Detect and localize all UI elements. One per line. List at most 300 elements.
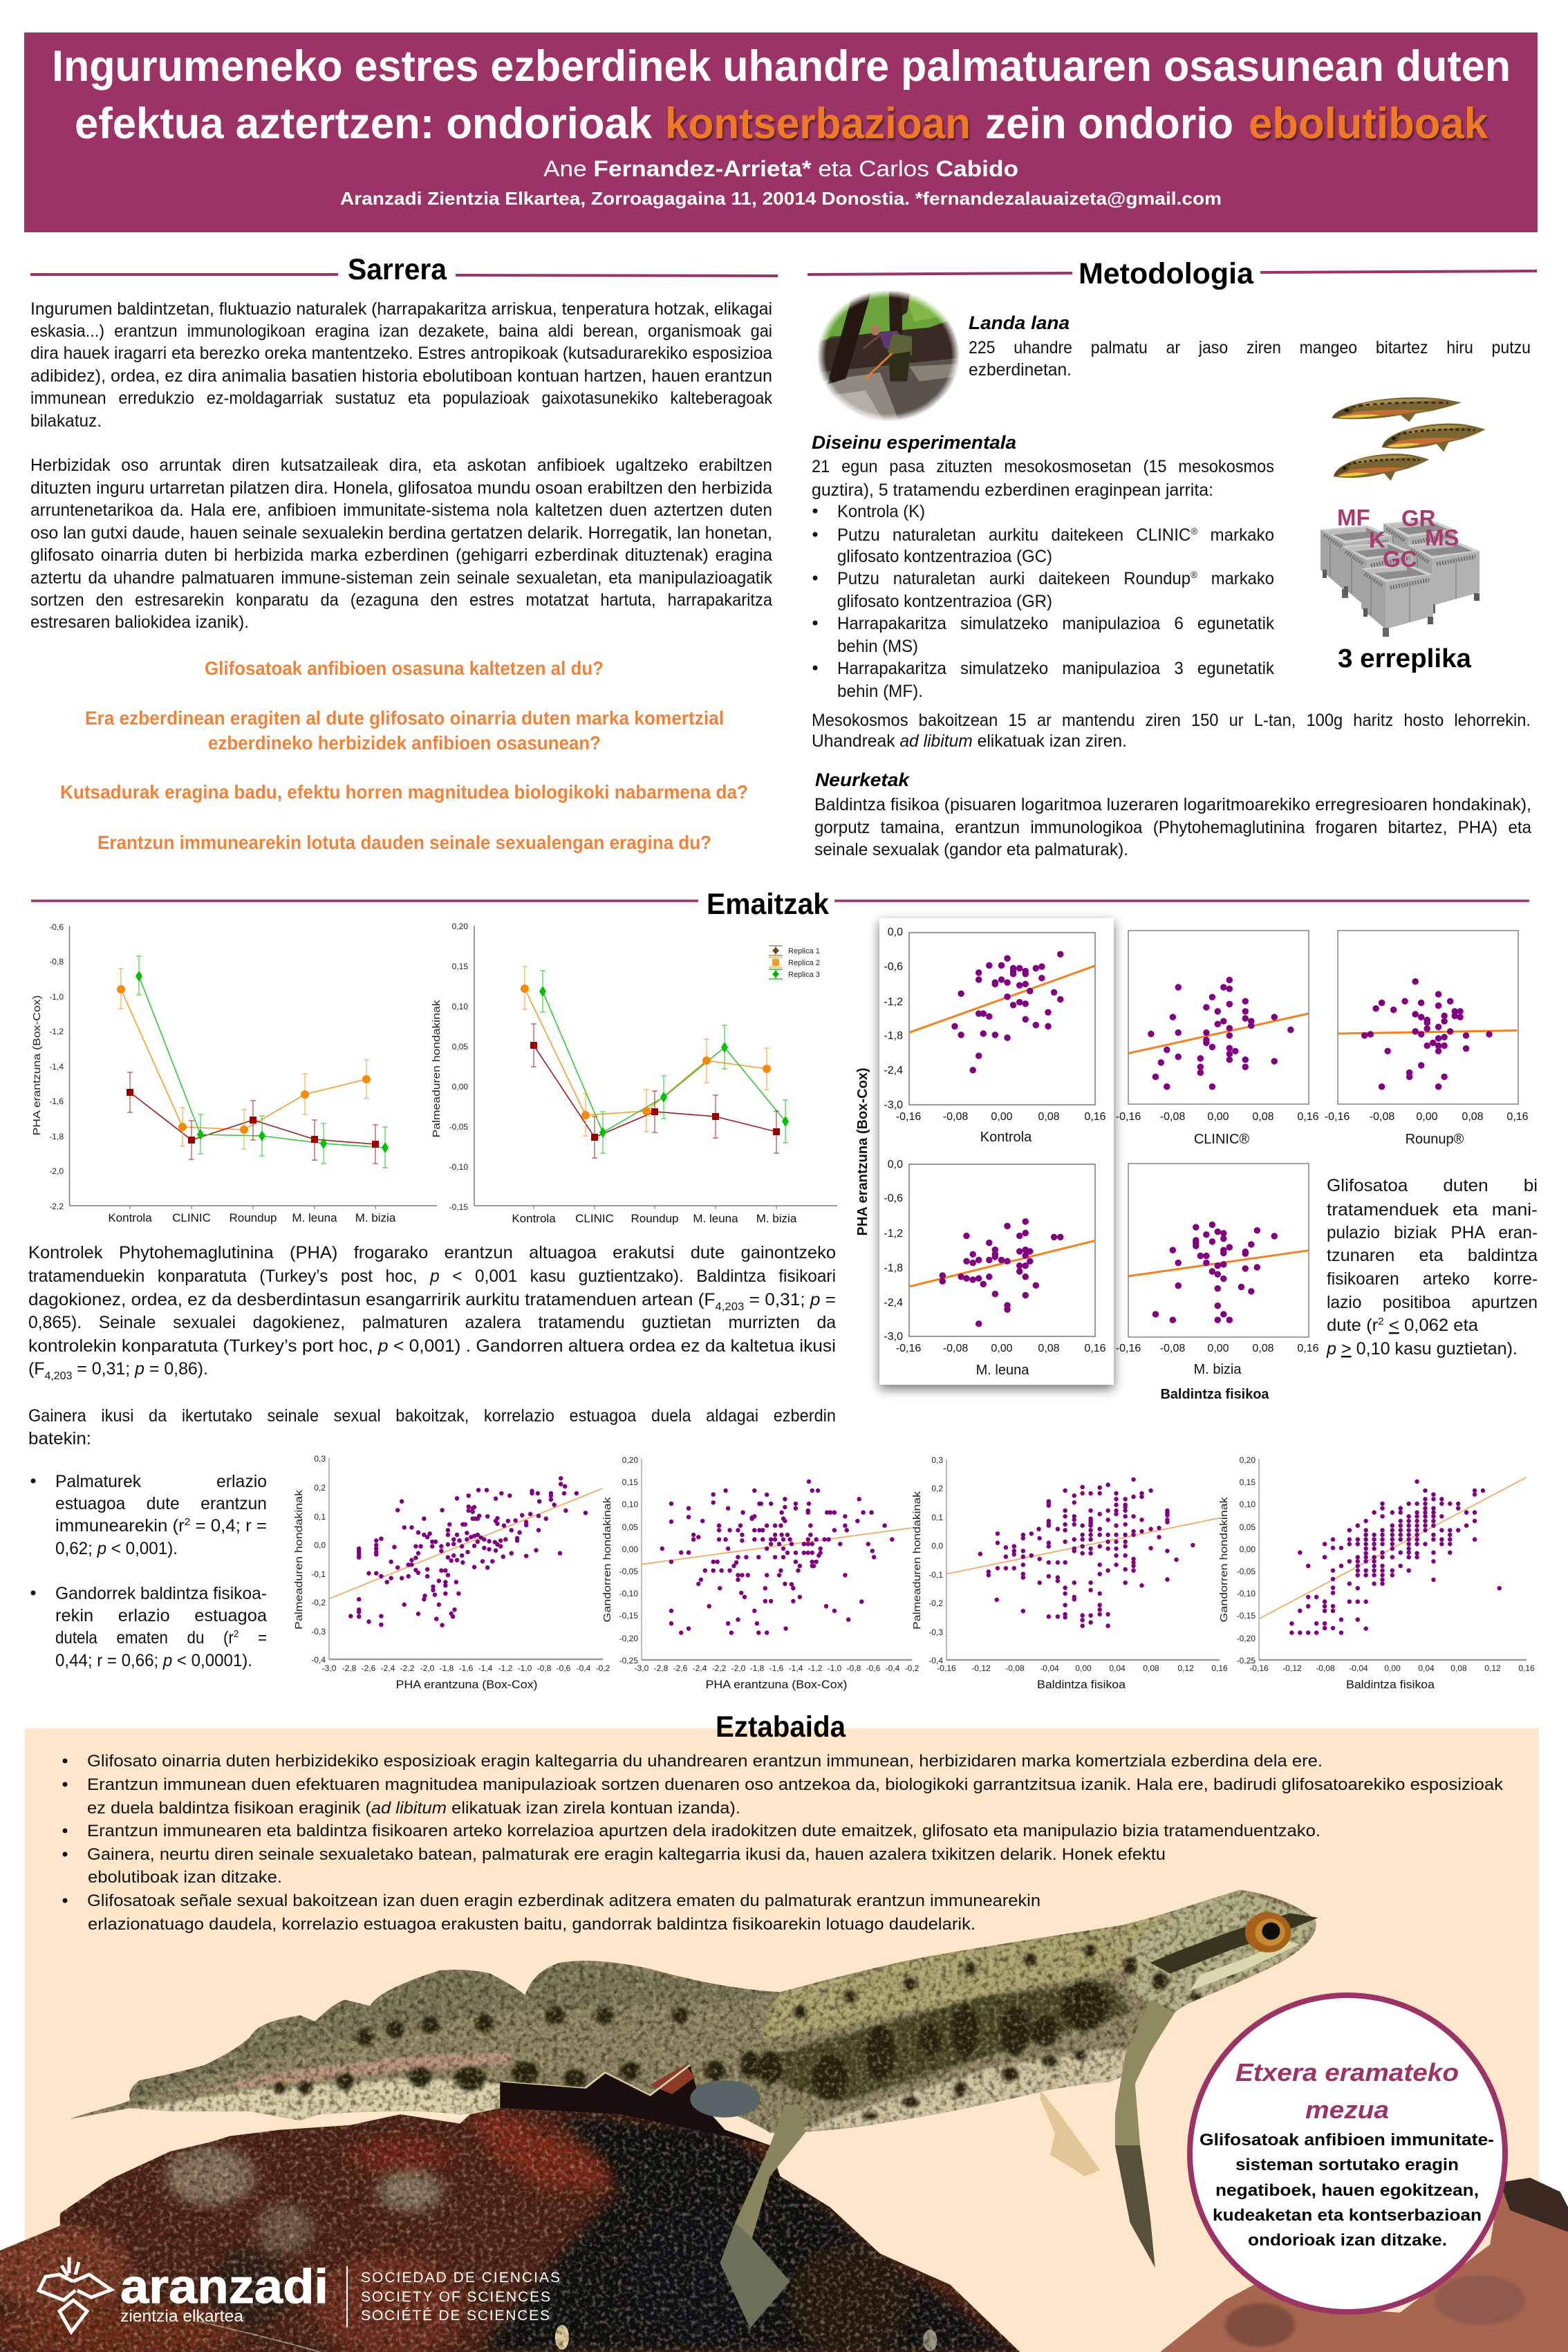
plot: M. leuna: M. leuna bbox=[976, 1363, 1029, 1378]
text block: introduction: Herbizidak oso arruntak diren kutsatzaileak dira, eta askotan anfibioek ugaltzeko erabiltzen bbox=[30, 456, 772, 475]
chart: crest vs body condition scatter bbox=[1218, 1455, 1535, 1691]
plot: M. leuna: 0,08 bbox=[1038, 1343, 1060, 1354]
chart: Palmeaduren hondakinak by treatment bbox=[431, 922, 837, 1225]
text block: Diseinu esperimentala: 21 egun pasa zituzten mesokosmosetan (15 mesokosmos bbox=[812, 457, 1274, 476]
chart: crest vs PHA scatter: 0,10 bbox=[622, 1500, 638, 1509]
chart: palm vs PHA scatter: -0,3 bbox=[311, 1627, 326, 1636]
icon: mesocosm crates bbox=[1320, 505, 1480, 637]
text block: introduction: dira hauek iragarri eta berezko oreka mantentzeko. Estres antropikoak (kutsadurarekiko esposizioa bbox=[30, 344, 772, 363]
callout: take-home message: sisteman sortutako eragin bbox=[1235, 2156, 1459, 2174]
chart: Palmeaduren hondakinak by treatment: M. bizia bbox=[756, 1212, 797, 1225]
text block: discussion bullets: Gainera, neurtu diren seinale sexualetako batean, palmaturak ere eragin kaltegarria ikusi da, hauen azalera txikitzen delarik. Honek efektu bbox=[87, 1845, 1166, 1864]
chart: crest vs PHA scatter: -0,20 bbox=[619, 1634, 638, 1643]
chart: palm vs PHA scatter: -0,2 bbox=[311, 1598, 326, 1607]
chart: palm vs body condition scatter: 0,00 bbox=[1075, 1663, 1092, 1673]
chart: crest vs body condition scatter: 0,16 bbox=[1518, 1663, 1535, 1673]
plot: M. bizia: 0,00 bbox=[1207, 1343, 1229, 1354]
skin and leaf texture bbox=[0, 1890, 1316, 2352]
chart legend: Replica 1 bbox=[788, 947, 820, 955]
chart: palm vs PHA scatter: -1,2 bbox=[498, 1663, 513, 1673]
callout: take-home message: negatiboek, hauen egokitzean, bbox=[1215, 2181, 1479, 2200]
text block: PHA results: p = 0,86). bbox=[135, 1359, 208, 1379]
text block: PHA results: (F bbox=[28, 1359, 45, 1379]
research questions bbox=[60, 657, 748, 853]
newt legs bbox=[720, 2000, 1175, 2328]
plot: Kontrola: -3,0 bbox=[884, 1099, 903, 1111]
chart: PHA erantzuna by treatment: -1,2 bbox=[49, 1027, 64, 1036]
chart: palm vs body condition scatter: -0,16 bbox=[937, 1663, 956, 1673]
text block: PHA results: = 0,31; bbox=[72, 1359, 135, 1379]
newt eye and head stripes bbox=[1150, 1912, 1318, 1990]
chart: palm vs PHA scatter: 0,2 bbox=[314, 1483, 326, 1493]
chart legend: Replica 3 bbox=[788, 971, 820, 979]
plot: Kontrola: 0,00 bbox=[991, 1111, 1013, 1123]
text block: correlation note: tzunaren eta baldintza bbox=[1327, 1246, 1538, 1265]
icon: mesocosm crates: MF bbox=[1337, 505, 1370, 530]
text block: PHA results: 4,203 bbox=[715, 1301, 745, 1313]
chart: crest vs PHA scatter: Gandorren hondakinak bbox=[601, 1497, 613, 1622]
chart: crest vs PHA scatter: -0,05 bbox=[619, 1567, 638, 1576]
text block: correlation bullets: erlazio bbox=[216, 1472, 267, 1491]
plot: CLINIC bbox=[1116, 931, 1319, 1147]
leaf: curled dark edge over the newt bbox=[500, 2065, 770, 2145]
chart: crest vs PHA scatter: -2,4 bbox=[693, 1663, 707, 1673]
heading: Eztabaida: Eztabaida bbox=[716, 1710, 846, 1744]
header banner bbox=[24, 32, 1538, 232]
chart: crest vs PHA scatter: -2,2 bbox=[712, 1663, 727, 1673]
plot: M. leuna: -2,4 bbox=[884, 1297, 903, 1309]
icon: mesocosm crates: GC bbox=[1383, 546, 1417, 572]
chart: PHA erantzuna by treatment: -0,6 bbox=[49, 922, 64, 932]
callout: take-home message: Glifosatoak anfibioen immunitate- bbox=[1200, 2131, 1494, 2149]
chart: palm vs PHA scatter: -1,8 bbox=[440, 1663, 454, 1673]
logo: aranzadi: zientzia elkartea bbox=[120, 2307, 244, 2326]
newt body bbox=[60, 1890, 1320, 2176]
chart: crest vs body condition scatter: 0,15 bbox=[1240, 1477, 1256, 1487]
plot: Kontrola: -0,08 bbox=[943, 1111, 968, 1123]
leaf: right bbox=[1160, 2178, 1568, 2352]
chart: palm vs PHA scatter: -1,0 bbox=[518, 1663, 532, 1673]
treatment list: behin (MS) bbox=[837, 637, 918, 656]
plot: M. bizia: 0,08 bbox=[1252, 1343, 1274, 1354]
chart: crest vs body condition scatter: 0,20 bbox=[1240, 1455, 1256, 1465]
card: highlighted control and mild plots bbox=[879, 918, 1114, 1385]
text block: Diseinu esperimentala: Mesokosmos bakoitzean 15 ar mantendu ziren 150 ur L-tan, 100g haritz hosto lehorrekin. bbox=[812, 711, 1531, 730]
text block: Landa lana: 225 uhandre palmatu ar jaso ziren mangeo bitartez hiru putzu bbox=[969, 338, 1531, 357]
icon: aranzadi emblem bbox=[39, 2257, 111, 2332]
text block: correlation bullets: rekin erlazio estuagoa bbox=[55, 1606, 267, 1625]
text block: introduction: estresaren baliokidea izanik). bbox=[30, 613, 249, 632]
heading: Sarrera: Sarrera bbox=[348, 253, 447, 286]
chart: Palmeaduren hondakinak by treatment: 0,00 bbox=[452, 1082, 468, 1092]
chart: crest vs PHA scatter: -1,8 bbox=[750, 1663, 765, 1673]
icon: mesocosm crates: GR bbox=[1401, 505, 1436, 531]
chart: PHA erantzuna by treatment bbox=[31, 922, 437, 1224]
text block: correlation note: tratamenduek eta mani- bbox=[1327, 1200, 1538, 1220]
chart: palm vs PHA scatter: -2,6 bbox=[362, 1663, 376, 1673]
text block: correlation bullets: Palmaturek bbox=[55, 1472, 141, 1491]
chart: palm vs PHA scatter: PHA erantzuna (Box-Cox) bbox=[395, 1678, 538, 1691]
chart: PHA erantzuna by treatment: -2,0 bbox=[49, 1166, 64, 1176]
chart: palm vs body condition scatter: Palmeaduren hondakinak bbox=[911, 1491, 923, 1630]
text block: correlation bullets: 2 bbox=[234, 1628, 239, 1640]
text block: Diseinu esperimentala: guztira), 5 tratamendu ezberdinen eraginpean jarrita: bbox=[812, 480, 1213, 500]
chart: crest vs PHA scatter: -0,2 bbox=[905, 1663, 920, 1673]
icon: mesocosm crates: K bbox=[1369, 527, 1385, 552]
plot: CLINIC: -0,16 bbox=[1116, 1111, 1141, 1123]
text block: Landa lana bbox=[969, 312, 1531, 380]
text block: Landa lana: ezberdinetan. bbox=[969, 360, 1072, 380]
plot: Roundup: Rounup® bbox=[1406, 1132, 1464, 1147]
chart: PHA erantzuna by treatment: CLINIC bbox=[172, 1211, 211, 1224]
text block: introduction: oso lan gutxi daude, hauen seinale sexualekin berdina gertatzen delarik. Horregatik, lan honetan, bbox=[30, 523, 772, 543]
text block: correlation note: 2 bbox=[1378, 1316, 1384, 1327]
plot: Kontrola: -1,8 bbox=[884, 1030, 903, 1042]
plot: M. bizia: M. bizia bbox=[1194, 1362, 1242, 1377]
chart: PHA erantzuna by treatment: Roundup bbox=[229, 1211, 277, 1224]
plot: M. bizia: -0,16 bbox=[1116, 1343, 1141, 1354]
plot: Kontrola: 0,0 bbox=[888, 926, 903, 938]
text block: correlation bullets: immunearekin (r bbox=[55, 1516, 180, 1536]
chart: palm vs body condition scatter: -0,2 bbox=[928, 1598, 943, 1608]
chart: palm vs body condition scatter: -0,12 bbox=[971, 1663, 991, 1673]
illustration: newt on a leaf bbox=[0, 1867, 1568, 2352]
text block: PHA results: p = bbox=[810, 1290, 835, 1309]
text block: discussion bullets: Glifosatoak señale sexual bakoitzean izan duen eragin ezberdinak aditzera ematen du palmaturak erantzun immunearekin bbox=[87, 1892, 1040, 1910]
chart: PHA erantzuna by treatment: M. bizia bbox=[355, 1211, 396, 1224]
text block: Neurketak: gorputz tamaina, erantzun immunologikoa (Phytohemaglutinina frogaren bitartez, PHA) eta bbox=[814, 818, 1531, 837]
text block: discussion bullets: Erantzun immunearen eta baldintza fisikoaren arteko korrelazioa apurtzen dela iradokitzen dute emaitzek, glifosato eta manipulazio bizia tratamenduentzako. bbox=[87, 1822, 1320, 1840]
chart: palm vs body condition scatter: 0,2 bbox=[931, 1484, 943, 1493]
text block: introduction: dituzten inguru urtarretan pilatzen dira. Honela, glifosatoa mundu osoan erabiltzen den herbizida bbox=[30, 478, 772, 498]
text block: Neurketak bbox=[814, 769, 1531, 859]
poster title: ebolutiboak bbox=[1249, 100, 1488, 148]
chart: crest vs body condition scatter: 0,08 bbox=[1450, 1663, 1467, 1673]
chart: PHA erantzuna by treatment: -1,8 bbox=[49, 1132, 64, 1141]
callout: take-home message bbox=[1190, 1995, 1505, 2312]
chart: crest vs body condition scatter: -0,25 bbox=[1237, 1656, 1256, 1665]
chart: Palmeaduren hondakinak by treatment: 0,15 bbox=[452, 962, 468, 971]
text block: Neurketak: Neurketak bbox=[815, 769, 911, 790]
plot: M. leuna: -0,08 bbox=[943, 1343, 968, 1354]
plot: Roundup: -0,08 bbox=[1370, 1111, 1394, 1123]
chart: palm vs PHA scatter: -0,4 bbox=[311, 1655, 326, 1665]
chart: crest vs PHA scatter: -1,4 bbox=[789, 1663, 803, 1673]
logo: aranzadi: SOCIEDAD DE CIENCIAS bbox=[361, 2270, 560, 2286]
text block: introduction: Ingurumen baldintzetan, fluktuazio naturalek (harrapakaritza arriskua, tenperatura hotzak, elikagai bbox=[30, 299, 772, 319]
text block: correlation bullets bbox=[30, 1472, 267, 1670]
plot: Kontrola: -2,4 bbox=[884, 1065, 903, 1076]
chart: palm vs body condition scatter: -0,08 bbox=[1005, 1663, 1025, 1673]
logo: aranzadi bbox=[39, 2257, 560, 2332]
plot: Kontrola: Kontrola bbox=[980, 1130, 1032, 1145]
chart: crest vs body condition scatter: -0,16 bbox=[1249, 1663, 1269, 1673]
chart: crest vs body condition scatter: 0,00 bbox=[1384, 1663, 1401, 1673]
text block: correlation bullets: Gandorrek baldintza fisikoa- bbox=[55, 1584, 267, 1603]
text block: discussion bullets: Glifosato oinarria duten herbizidekiko esposizioak eragin kaltegarria du uhandrearen erantzun immunean, herbizidaren marka komertziala ezberdina dela ere. bbox=[87, 1752, 1323, 1771]
chart: palm vs body condition scatter: 0,1 bbox=[931, 1513, 943, 1522]
plot: M. leuna: 0,00 bbox=[991, 1343, 1013, 1354]
chart: crest vs PHA scatter: -0,4 bbox=[886, 1663, 900, 1673]
chart: palm vs PHA scatter: -3,0 bbox=[322, 1663, 337, 1673]
chart: crest vs PHA scatter: 0,05 bbox=[622, 1522, 638, 1532]
chart: palm vs body condition scatter: 0,12 bbox=[1177, 1663, 1194, 1673]
chart: palm vs PHA scatter: 0,1 bbox=[314, 1512, 326, 1522]
text block: PHA results: = 0,31; bbox=[744, 1290, 810, 1309]
treatment list: glifosato kontzentrazioa (GR) bbox=[837, 592, 1052, 611]
chart: palm vs body condition scatter: 0,0 bbox=[931, 1541, 943, 1551]
chart: palm vs body condition scatter: 0,16 bbox=[1211, 1663, 1228, 1673]
chart: palm vs PHA scatter: -2,8 bbox=[342, 1663, 357, 1673]
chart: palm vs PHA scatter: -2,0 bbox=[420, 1663, 435, 1673]
text block: discussion bullets: ez duela baldintza fisikoan eraginik ( ad libitum elikatuak izan zirela kontuan izanda). bbox=[87, 1799, 740, 1818]
chart: palm vs PHA scatter: -0,2 bbox=[596, 1663, 610, 1673]
chart: palm vs body condition scatter: 0,08 bbox=[1143, 1663, 1159, 1673]
text block: introduction: bilakatuz. bbox=[30, 411, 102, 431]
text block: correlation note: p > 0,10 kasu guztietan). bbox=[1326, 1339, 1518, 1359]
text block: PHA results bbox=[28, 1243, 836, 1448]
plot: Kontrola: -0,6 bbox=[884, 961, 903, 973]
chart: PHA erantzuna by treatment: -2,2 bbox=[49, 1202, 64, 1211]
text block: Neurketak: Baldintza fisikoa (pisuaren logaritmoa luzeraren logaritmoarekiko erregresioaren hondakinak), bbox=[814, 795, 1531, 814]
chart: palm vs body condition scatter: Baldintza fisikoa bbox=[1037, 1678, 1126, 1691]
chart: crest vs PHA scatter: -1,6 bbox=[769, 1663, 784, 1673]
plot: Kontrola bbox=[884, 926, 1106, 1145]
text block: Diseinu esperimentala bbox=[812, 432, 1531, 751]
photo: field work bbox=[817, 290, 960, 421]
plot: Kontrola: -0,16 bbox=[896, 1111, 921, 1123]
chart: crest vs PHA scatter: 0,15 bbox=[622, 1477, 638, 1487]
chart: Palmeaduren hondakinak by treatment: Kontrola bbox=[512, 1212, 556, 1225]
chart: palm vs body condition scatter bbox=[911, 1455, 1228, 1691]
treatment list: behin (MF). bbox=[837, 682, 923, 701]
treatment list: ® bbox=[1191, 569, 1197, 580]
chart: PHA erantzuna by treatment: Kontrola bbox=[108, 1211, 152, 1224]
chart: crest vs PHA scatter: -0,15 bbox=[619, 1611, 638, 1621]
text block: PHA results: batekin: bbox=[28, 1429, 91, 1448]
chart: crest vs body condition scatter: -0,10 bbox=[1237, 1589, 1256, 1598]
chart: crest vs PHA scatter: -0,8 bbox=[847, 1663, 861, 1673]
plot: CLINIC: 0,08 bbox=[1252, 1111, 1274, 1123]
poster title: efektua aztertzen: ondorioak bbox=[75, 100, 653, 148]
chart: palm vs PHA scatter: -1,4 bbox=[478, 1663, 493, 1673]
chart: Palmeaduren hondakinak by treatment: CLINIC bbox=[575, 1212, 614, 1225]
chart: Palmeaduren hondakinak by treatment: -0,05 bbox=[449, 1122, 468, 1132]
plot: M. leuna: 0,0 bbox=[888, 1159, 903, 1170]
treatment list: Putzu naturaletan aurkitu daitekeen CLINIC bbox=[837, 525, 1204, 545]
chart legend bbox=[769, 946, 820, 979]
panel: Sarrera bbox=[30, 253, 778, 853]
text block: Landa lana: Landa lana bbox=[969, 312, 1070, 333]
text block: PHA results: 4,203 bbox=[45, 1370, 72, 1382]
chart: PHA erantzuna by treatment: -0,8 bbox=[49, 957, 64, 967]
chart: Palmeaduren hondakinak by treatment: Roundup bbox=[631, 1212, 679, 1225]
chart: crest vs PHA scatter: -0,25 bbox=[619, 1656, 638, 1665]
plot: CLINIC: 0,16 bbox=[1297, 1111, 1319, 1123]
chart: crest vs body condition scatter: Gandorren hondakinak bbox=[1218, 1497, 1230, 1622]
chart: crest vs body condition scatter: -0,04 bbox=[1349, 1663, 1368, 1673]
plot: Kontrola: 0,16 bbox=[1084, 1111, 1106, 1123]
plot: M. leuna: -1,2 bbox=[884, 1228, 903, 1240]
chart: Palmeaduren hondakinak by treatment: M. leuna bbox=[693, 1212, 738, 1225]
text block: introduction: immunean erredukzio ez-moldagarriak sustatuz eta populazioak gaixotasunekiko kalteberagoak bbox=[30, 389, 772, 408]
text block: introduction: aztertu da uhandre palmatuaren immune-sisteman zein seinale sexualetan, eta manipulazioagatik bbox=[30, 568, 772, 588]
chart: crest vs body condition scatter: -0,15 bbox=[1237, 1611, 1256, 1621]
chart: crest vs PHA scatter: -1,2 bbox=[808, 1663, 823, 1673]
chart: palm vs PHA scatter: 0,0 bbox=[314, 1540, 326, 1550]
treatment list: Harrapakaritza simulatzeko manipulazioa 3 egunetatik bbox=[837, 659, 1274, 678]
chart: crest vs PHA scatter: -2,6 bbox=[673, 1663, 688, 1673]
poster title: kontserbazioan bbox=[665, 100, 971, 148]
research questions: Era ezberdinean eragiten al dute glifosato oinarria duten marka komertzial bbox=[85, 707, 724, 729]
plot: Roundup: -0,16 bbox=[1325, 1111, 1350, 1123]
x axis label: Baldintza fisikoa bbox=[1160, 1387, 1269, 1402]
plot: M. leuna: 0,16 bbox=[1084, 1343, 1106, 1354]
chart: palm vs body condition scatter: -0,4 bbox=[928, 1656, 943, 1665]
chart: crest vs PHA scatter: PHA erantzuna (Box-Cox) bbox=[705, 1678, 848, 1691]
chart: palm vs PHA scatter: -2,2 bbox=[400, 1663, 415, 1673]
callout: take-home message: Etxera eramateko bbox=[1235, 2058, 1459, 2087]
treatment list: markako bbox=[1197, 525, 1274, 545]
chart: crest vs body condition scatter: -0,12 bbox=[1282, 1663, 1302, 1673]
panel: Metodologia bbox=[808, 257, 1537, 859]
heading: Metodologia: Metodologia bbox=[1079, 257, 1254, 290]
text block: correlation note: pulazio biziak PHA eran- bbox=[1327, 1223, 1538, 1242]
callout: take-home message: ondorioak izan ditzake. bbox=[1248, 2231, 1447, 2250]
chart: palm vs PHA scatter: -2,4 bbox=[381, 1663, 395, 1673]
plot: M. leuna: -1,8 bbox=[884, 1262, 903, 1274]
chart: crest vs PHA scatter: -2,8 bbox=[654, 1663, 669, 1673]
treatment list: Putzu naturaletan aurki daitekeen Roundup bbox=[837, 569, 1208, 588]
text block: introduction: eskasia...) erantzun immunologikoan eragina izan dezakete, baina aldi berean, organismoak gai bbox=[30, 321, 772, 341]
research questions: Kutsadurak eragina badu, efektu horren magnitudea biologikoki nabarmena da? bbox=[60, 781, 748, 803]
text block: correlation note: fisikoaren arteko korre- bbox=[1327, 1269, 1538, 1289]
plot: Roundup: 0,00 bbox=[1416, 1111, 1438, 1123]
chart: palm vs PHA scatter: Palmeaduren hondakinak bbox=[293, 1489, 305, 1630]
label: 3 erreplika: 3 erreplika bbox=[1338, 644, 1472, 673]
chart: crest vs body condition scatter: 0,00 bbox=[1240, 1544, 1256, 1554]
text block: correlation bullets: dutela ematen du (r bbox=[55, 1628, 255, 1648]
text block: PHA results: Gainera ikusi da ikertutako seinale sexual bakoitzak, korrelazio estuagoa duela aldagai ezberdin bbox=[28, 1406, 836, 1426]
text block: introduction: arruntenetarikoa da. Hala ere, anfibioen immunitate-sistema nola kaltetzen duen aztertzen duten bbox=[30, 501, 772, 520]
chart: palm vs body condition scatter: -0,3 bbox=[928, 1627, 943, 1637]
chart: crest vs body condition scatter: 0,10 bbox=[1240, 1500, 1256, 1509]
text block: correlation note: dute (r bbox=[1327, 1316, 1376, 1335]
chart: crest vs body condition scatter: 0,05 bbox=[1240, 1522, 1256, 1532]
chart: crest vs PHA scatter: 0,20 bbox=[622, 1455, 638, 1465]
chart: crest vs PHA scatter: 0,00 bbox=[622, 1544, 638, 1554]
plot: M. leuna bbox=[884, 1159, 1106, 1378]
research questions: Erantzun immunearekin lotuta dauden seinale sexualengan eragina du? bbox=[97, 832, 711, 853]
treatment list: markako bbox=[1197, 569, 1274, 588]
chart: PHA erantzuna by treatment: PHA erantzuna (Box-Cox) bbox=[31, 996, 43, 1135]
text block: discussion bullets: ebolutiboak izan ditzake. bbox=[88, 1868, 282, 1887]
plot: CLINIC: -0,08 bbox=[1160, 1111, 1185, 1123]
treatment list: ® bbox=[1191, 525, 1198, 536]
y axis label: PHA erantzuna (Box-Cox) bbox=[855, 1068, 870, 1235]
chart: PHA erantzuna by treatment: -1,4 bbox=[49, 1062, 64, 1072]
text block: discussion bullets: erlazionatuago daudela, korrelazio estuagoa erakusten baitu, gandorrak baldintza fisikoarekin lotuago daudelarik. bbox=[88, 1915, 976, 1934]
plot: M. leuna: -0,16 bbox=[896, 1343, 921, 1354]
chart: PHA erantzuna by treatment: -1,0 bbox=[49, 992, 64, 1002]
leaf: main bbox=[0, 2108, 1020, 2352]
chart: PHA erantzuna by treatment: M. leuna bbox=[292, 1211, 337, 1224]
icon: mesocosm crates: MS bbox=[1425, 525, 1459, 550]
plot: M. bizia: -0,08 bbox=[1160, 1343, 1185, 1354]
text block: introduction: glifosato oinarria duten bi herbizida marka ezberdinen (gehigarri ezberdinak dituztenak) eragina bbox=[30, 545, 772, 565]
chart: crest vs body condition scatter: -0,05 bbox=[1237, 1567, 1256, 1576]
text block: discussion bullets: Erantzun immunean duen efektuaren magnitudea manipulazioak sortzen duenaren oso antzekoa da, biologikoki garrantzitsua izanik. Hala ere, badirudi glifosatoarekiko esposizioak bbox=[87, 1775, 1504, 1794]
plot: M. leuna: -0,6 bbox=[884, 1193, 903, 1204]
text block: PHA results: dagokionez, ordea, ez da desberdintasun esangarririk aurkitu tratamenduen artean (F bbox=[28, 1290, 684, 1309]
plot: Kontrola: -1,2 bbox=[884, 996, 903, 1008]
text block: PHA results: 0,865). Seinale sexualei dagokienez, palmaturen azalera tratamendu guztietan murrizten da bbox=[28, 1313, 836, 1332]
chart: crest vs PHA scatter: -0,6 bbox=[866, 1663, 881, 1673]
chart: PHA erantzuna by treatment: -1,6 bbox=[49, 1096, 64, 1106]
logo: aranzadi: aranzadi bbox=[120, 2259, 328, 2313]
text block: introduction bbox=[30, 299, 772, 632]
chart: crest vs body condition scatter: 0,04 bbox=[1418, 1663, 1435, 1673]
text block: correlation note: Glifosatoa duten bi bbox=[1327, 1176, 1538, 1195]
chart: Palmeaduren hondakinak by treatment: -0,10 bbox=[449, 1162, 468, 1172]
callout: take-home message: kudeaketan eta kontserbazioan bbox=[1213, 2206, 1482, 2225]
text block: correlation bullets: 0,44; r = 0,66; p < 0,0001). bbox=[55, 1651, 252, 1670]
chart: Palmeaduren hondakinak by treatment: Palmeaduren hondakinak bbox=[431, 1000, 442, 1138]
text block: introduction: sortzen den estresarekin konparatu da (ezaguna den estres motatzat hartuta, harrapakaritza bbox=[30, 590, 772, 610]
chart: palm vs PHA scatter: -0,1 bbox=[311, 1569, 326, 1579]
chart: crest vs body condition scatter: -0,08 bbox=[1316, 1663, 1335, 1673]
chart: crest vs PHA scatter: -2,0 bbox=[731, 1663, 746, 1673]
chart: palm vs PHA scatter: -0,6 bbox=[557, 1663, 571, 1673]
plot: Roundup: 0,08 bbox=[1462, 1111, 1484, 1123]
text block: discussion bullets bbox=[62, 1752, 1504, 1934]
panel: treatment scatter plots bbox=[855, 918, 1538, 1402]
chart legend: Replica 2 bbox=[788, 959, 820, 967]
chart: palm vs body condition scatter: -0,1 bbox=[928, 1570, 943, 1580]
chart: Palmeaduren hondakinak by treatment: 0,10 bbox=[452, 1002, 468, 1011]
chart: palm vs PHA scatter: -1,6 bbox=[459, 1663, 474, 1673]
text block: correlation note: lazio positiboa apurtzen bbox=[1327, 1293, 1538, 1312]
text block: correlation bullets: 2 bbox=[185, 1516, 190, 1528]
text block: correlation bullets: = 0,4; r = bbox=[190, 1516, 267, 1536]
research questions: ezberdineko herbizidek anfibioen osasunean? bbox=[208, 732, 601, 754]
text block: PHA results: Kontrolek Phytohemaglutinina (PHA) frogarako erantzun altuagoa erakutsi dute gainontzeko bbox=[28, 1243, 836, 1262]
treatment list: Harrapakaritza simulatzeko manipulazioa 6 egunetatik bbox=[837, 614, 1274, 633]
chart: Palmeaduren hondakinak by treatment: 0,05 bbox=[452, 1042, 468, 1052]
poster title: Ingurumeneko estres ezberdinek uhandre palmatuaren osasunean duten bbox=[52, 42, 1511, 91]
plot: CLINIC: 0,00 bbox=[1207, 1111, 1229, 1123]
chart: palm vs PHA scatter: -0,8 bbox=[537, 1663, 552, 1673]
text block: Neurketak: seinale sexualak (gandor eta palmaturak). bbox=[814, 840, 1128, 859]
treatment list: glifosato kontzentrazioa (GC) bbox=[837, 547, 1052, 566]
chart: palm vs body condition scatter: 0,04 bbox=[1109, 1663, 1126, 1673]
poster title bbox=[52, 42, 1511, 148]
text block: correlation bullets: = bbox=[239, 1628, 267, 1648]
plot: Roundup: 0,16 bbox=[1506, 1111, 1529, 1123]
chart: crest vs body condition scatter: -0,20 bbox=[1237, 1634, 1256, 1643]
text block: Diseinu esperimentala: Uhandreak ad libitum elikatuak izan ziren. bbox=[812, 731, 1127, 751]
text block: Diseinu esperimentala: Diseinu esperimentala bbox=[812, 432, 1016, 453]
plot: Roundup bbox=[1325, 931, 1529, 1147]
treatment list: Kontrola (K) bbox=[837, 502, 925, 521]
text block: correlation bullets: estuagoa dute erantzun bbox=[55, 1494, 267, 1513]
text block: correlation bullets: 0,62; p < 0,001). bbox=[55, 1539, 178, 1558]
chart: palm vs PHA scatter: 0,3 bbox=[314, 1454, 326, 1464]
poster title: zein ondorio bbox=[985, 100, 1233, 148]
text block: PHA results: kontrolekin konparatuta (Turkey’s port hoc, p < 0,001) . Gandorren altuera ordea ez da kaltetua ikusi bbox=[28, 1336, 836, 1356]
text block: introduction: adibidez), ordea, ez dira animalia basatien historia ebolutiboan kontuan hartzen, hauen erantzun bbox=[30, 366, 772, 386]
chart: crest vs PHA scatter: -3,0 bbox=[635, 1663, 649, 1673]
